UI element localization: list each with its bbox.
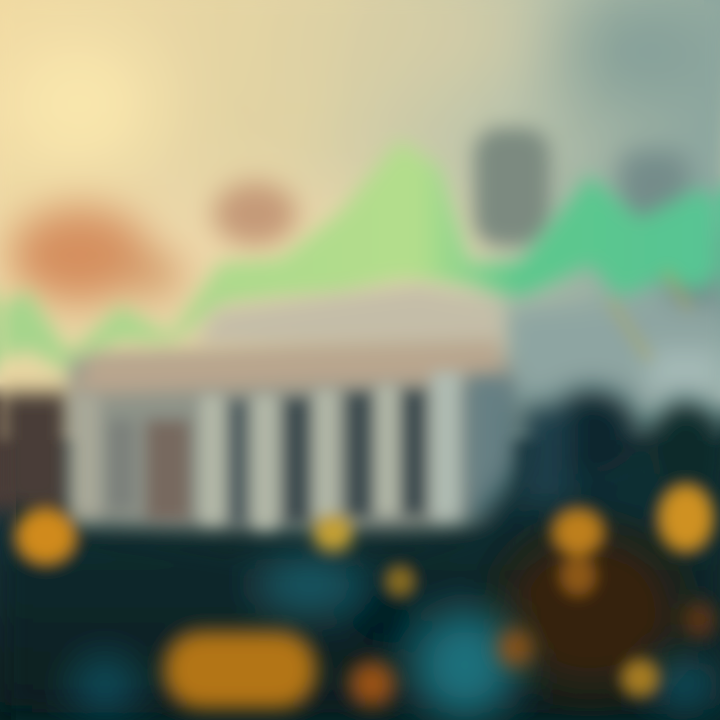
right edge base: [704, 0, 720, 720]
ground base: [0, 430, 720, 720]
roof pediment: [195, 285, 505, 350]
bokeh lights: [16, 485, 716, 708]
bokeh light bottom centre: [350, 662, 394, 706]
distant grey tower right: [618, 150, 720, 320]
left dark brown building: [0, 392, 70, 510]
bank building: [70, 285, 516, 530]
bokeh light small centre: [386, 566, 414, 596]
distant orange tower centre: [213, 182, 297, 246]
entablature: [70, 340, 505, 395]
warm brown shrub glow: [500, 530, 680, 690]
light columns: [72, 372, 462, 530]
bokeh light lower right: [498, 630, 532, 666]
teal foreground patches: [71, 557, 717, 720]
right side hazy building: [505, 305, 720, 420]
bokeh light far right: [659, 485, 713, 551]
bokeh light large bottom: [165, 632, 315, 708]
sky background: [0, 0, 720, 440]
bokeh light edge right: [684, 602, 716, 638]
bokeh light bottom right: [622, 660, 658, 696]
dark gaps between columns: [108, 390, 426, 525]
distant orange cloud left: [10, 207, 185, 303]
yellow streaks on right building: [610, 270, 690, 360]
building right side: [466, 375, 516, 520]
dark tree right: [520, 390, 720, 505]
green market chart: [0, 140, 720, 372]
bokeh lights right pair: [553, 509, 603, 596]
bokeh light left: [16, 508, 76, 564]
distant grey tower: [474, 128, 550, 246]
sky base: [0, 0, 720, 430]
building facade: [70, 360, 510, 530]
bokeh light centre: [313, 515, 353, 551]
left edge base: [0, 0, 16, 720]
foreground ground: [0, 415, 720, 720]
